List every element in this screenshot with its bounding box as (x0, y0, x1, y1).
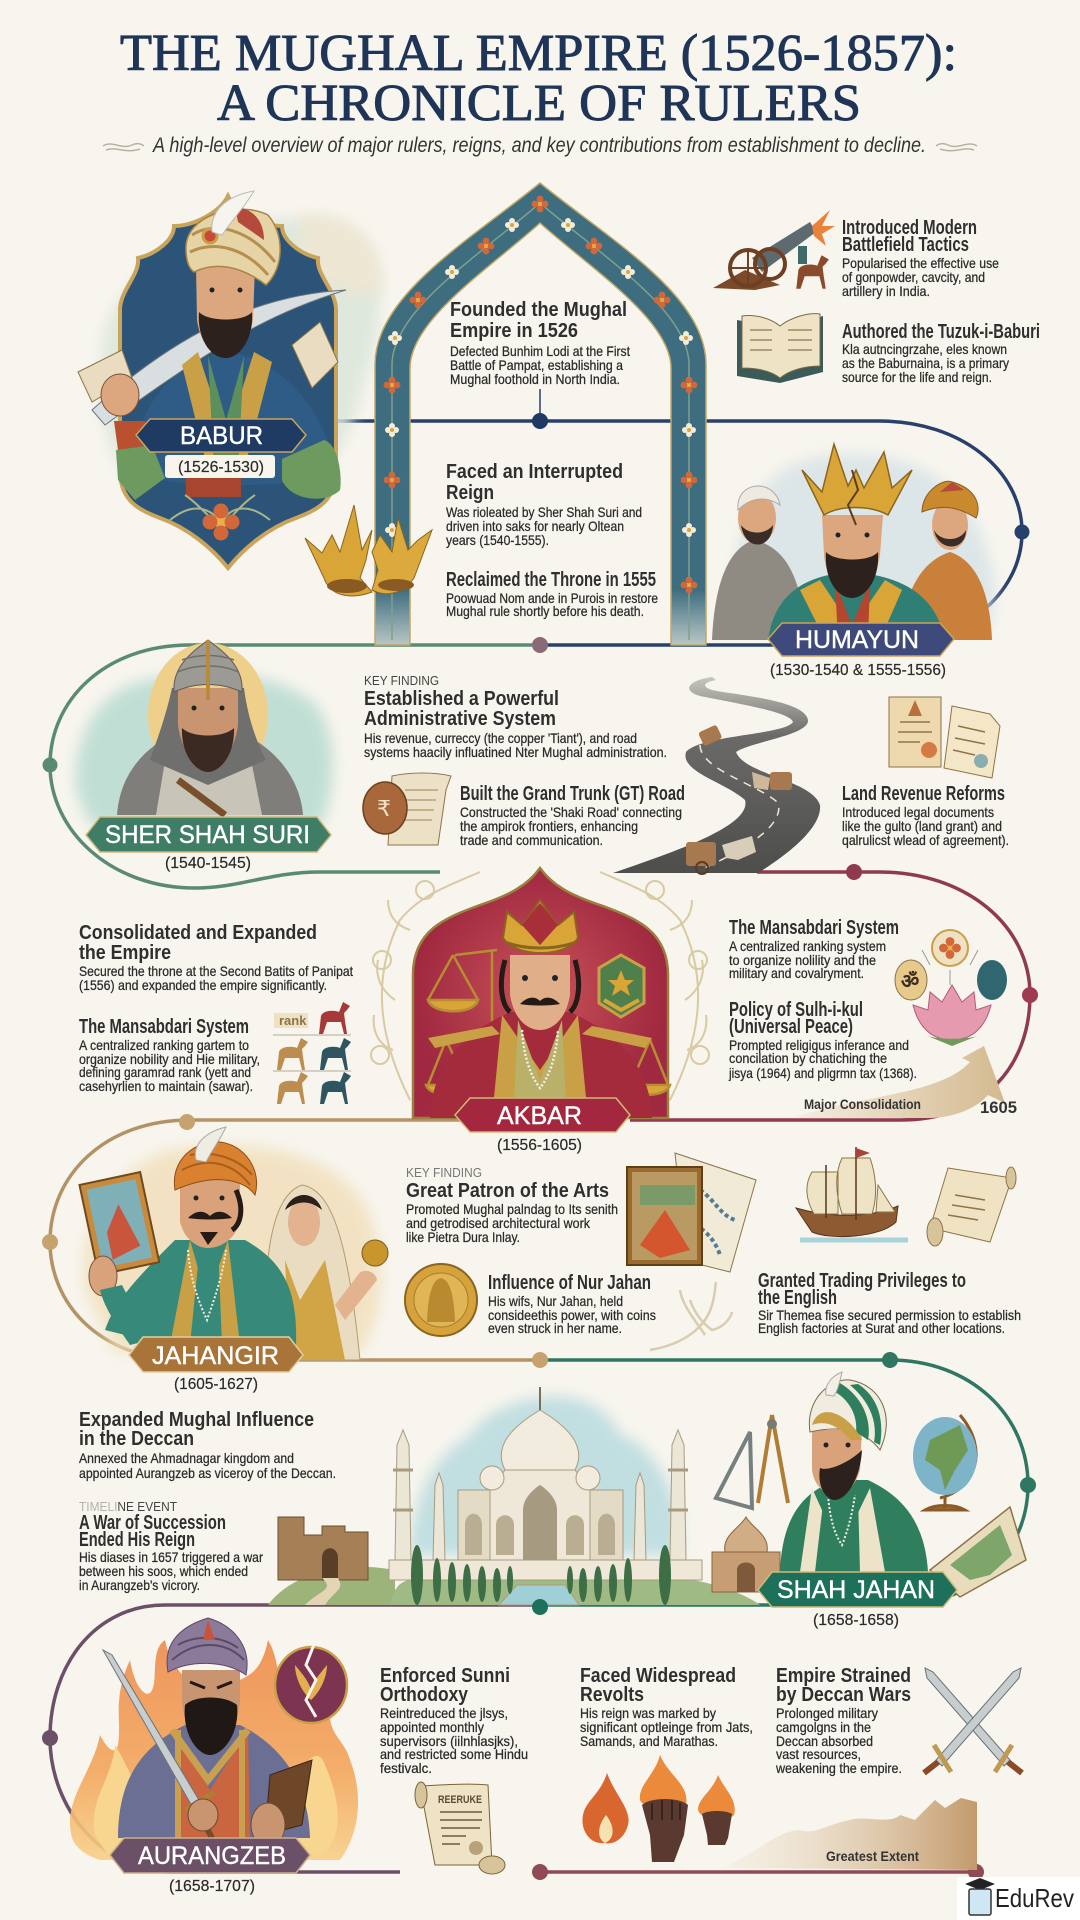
text: Policy of Sulh-i-kul: jisya (1964) and pligrmn tax (1368). (728, 1065, 917, 1081)
text: Enforced Sunni Orthodoxy: festivalc. (380, 1760, 432, 1776)
text: Introduced Modern Battlefield Tactics: Introduced Modern (842, 217, 977, 239)
face (180, 1180, 240, 1248)
text: Expanded Mughal Influence in the Deccan: appointed Aurangzeb as viceroy of the Deccan. (79, 1465, 336, 1481)
text: Great Patron of the Arts (406, 1165, 618, 1245)
text: Granted Trading Privileges (758, 1270, 1021, 1336)
scale right (626, 1040, 670, 1095)
cypress trees (411, 1545, 671, 1605)
text: Expanded Mughal Influence in the Deccan (79, 1409, 336, 1481)
text: Introduced Modern Battlefield Tactics: artillery in India. (842, 283, 930, 299)
pool (499, 1585, 579, 1605)
text: Faced Widespread Revolts: His reign was marked by (580, 1705, 716, 1721)
text: Great Patron of the Arts: and getrodised architectural work (406, 1215, 591, 1231)
text: Established a Powerful Administrative System: Administrative System (364, 708, 556, 730)
text: The Mansabdari System (left): organize nobility and Hie military, (79, 1051, 260, 1067)
icon: cracked shield (275, 1634, 347, 1723)
text: Faced Widespread Revolts (580, 1665, 753, 1749)
badge (599, 955, 644, 1017)
text: War of Succession: His diases in 1657 triggered a war (79, 1549, 263, 1565)
text: The Mansabdari System (left): defining garamrad rank (yett and (79, 1064, 251, 1080)
Humayun (768, 572, 945, 640)
icon: coin and scroll: ₹ (377, 796, 391, 821)
face (178, 688, 238, 765)
label: BABUR (136, 419, 306, 452)
text: Faced Widespread Revolts: Samands, and Marathas. (580, 1733, 718, 1749)
hand (101, 374, 139, 416)
left advisor (712, 540, 806, 640)
timeline nodes: Humayun (532, 524, 1030, 653)
crown (503, 900, 578, 953)
text: Granted Trading Privileges: the English (758, 1287, 837, 1309)
EduRev logo (957, 1877, 1080, 1920)
panel: Jahangir portrait (79, 1127, 388, 1360)
text: Great Patron of the Arts: Great Patron of the Arts (406, 1180, 609, 1202)
text: Faced an Interrupted Reign: Reign (446, 482, 494, 504)
icon: fort (268, 1517, 395, 1605)
text: Built the Grand Trunk Road: Constructed the 'Shaki Road' connecting (460, 804, 682, 820)
icon: rank and horses: rank (279, 1013, 307, 1028)
turban (186, 209, 280, 285)
text: Consolidated and Expanded the Empire: the Empire (79, 942, 171, 964)
text: The Mansabdari System (right): to organize nolility and the (729, 952, 876, 968)
main building (458, 1490, 623, 1560)
panel: Babur portrait (78, 191, 382, 568)
text: Faced Widespread Revolts: significant optleinge from Jats, (580, 1719, 753, 1735)
timeline node: Taj (532, 1599, 548, 1615)
text: Founded the Mughal Empire: Founded the Mughal (450, 299, 627, 321)
text: Empire Strained by Deccan Wars: by Deccan Wars (776, 1684, 911, 1706)
label: HUMAYUN: HUMAYUN (795, 626, 919, 654)
text: Consolidated and Expanded the Empire (79, 922, 353, 993)
title: A CHRONICLE OF RULERS (217, 75, 861, 132)
arrow: major consolidation (792, 1046, 1017, 1118)
wash (725, 454, 995, 630)
hand (89, 1256, 117, 1296)
text: Founded the Mughal Empire: Mughal foothold in North India. (450, 371, 620, 387)
timeline path connecting rulers (50, 421, 1030, 1872)
text: Land Revenue Reforms: Introduced legal documents (842, 804, 994, 820)
text: Faced an Interrupted Reign: years (1540-1555). (446, 532, 549, 548)
icon: ogee frame (120, 196, 336, 568)
arch (413, 868, 668, 1118)
text: Enforced Sunni Orthodoxy: appointed monthly (380, 1719, 484, 1735)
text: Empire Strained by Deccan Wars: camgolgns in the (776, 1719, 871, 1735)
label: SHAH JAHAN (758, 1572, 957, 1607)
text: Empire Strained by Deccan Wars: weakening the empire. (775, 1760, 902, 1776)
face (196, 266, 255, 354)
label: SHAH JAHAN: SHAH JAHAN (777, 1576, 935, 1604)
text: Policy of Sulh-i-kul: (Universal Peace) (729, 1016, 853, 1038)
Jahangir body (105, 1240, 296, 1345)
icon: rank and horses (273, 1002, 351, 1104)
scale left (426, 950, 497, 1095)
right advisor (900, 552, 992, 640)
text: Faced Widespread Revolts: Revolts (580, 1684, 644, 1706)
text: War of Succession: TIMELINE EVENT (79, 1499, 177, 1514)
date: Babur (165, 455, 275, 478)
wash (83, 1145, 381, 1352)
Nur Jahan (266, 1185, 360, 1360)
text: The Mansabdari System (right): military and covalryment. (729, 965, 864, 981)
chart: greatest extent area (723, 1798, 977, 1870)
text: Faced an Interrupted Reign (446, 461, 642, 548)
icon: cannon and horse (713, 210, 835, 290)
text: Reclaimed the Throne (446, 569, 658, 619)
text: Introduced Modern Battlefield Tactics: Popularised the effective use (842, 255, 999, 271)
dome (501, 1410, 579, 1470)
text: Land Revenue Reforms: qalrulicst wlead of agreement). (842, 832, 1009, 848)
label: BABUR: BABUR (180, 422, 263, 450)
face (182, 1670, 240, 1742)
robe (430, 1012, 652, 1118)
frame flower (170, 495, 270, 540)
text: Faced an Interrupted Reign: Faced an Interrupted (446, 461, 623, 483)
text: Land Revenue Reforms: Land Revenue Reforms (842, 783, 1005, 805)
timeline node: Sher Shah (42, 758, 58, 772)
date: Sher Shah: (1540-1545) (165, 855, 251, 872)
text: War of Succession: between his soos, which ended (79, 1563, 248, 1579)
label: JAHANGIR: JAHANGIR (152, 1342, 279, 1370)
arch frame (375, 183, 706, 645)
text: Influence of Nur Jahan: consideethis power, with coins (488, 1307, 656, 1323)
date: Jahangir: (1605-1627) (174, 1376, 258, 1393)
text: Policy of Sulh-i-kul (728, 999, 917, 1081)
text: Established a Powerful Administrative System: Established a Powerful (364, 688, 559, 710)
text: Faced an Interrupted Reign: Was rioleated by Sher Shah Suri and (446, 504, 642, 520)
text: Expanded Mughal Influence in the Deccan: Annexed the Ahmadnagar kingdom and (79, 1450, 294, 1466)
icon: crossed swords (924, 1668, 1022, 1773)
text: Built the Grand Trunk Road (460, 783, 685, 848)
text: The Mansabdari System (right): A centralized ranking system (729, 938, 886, 954)
icon: flames and raised fists (582, 1755, 735, 1862)
text: Authored the Tuzuk-i-Baburi: Kla autncingrzahe, eles known (842, 341, 1007, 357)
timeline nodes: Jahangir to Shah Jahan (532, 1352, 1036, 1493)
robe (135, 350, 335, 485)
text: Founded the Mughal Empire (450, 299, 630, 387)
text: Faced Widespread Revolts: Faced Widespread (580, 1665, 736, 1687)
text: Great Patron of the Arts: KEY FINDING (406, 1165, 482, 1180)
outer minarets (393, 1430, 688, 1560)
platform (389, 1560, 702, 1580)
label: AKBAR: AKBAR (497, 1102, 582, 1130)
text: Expanded Mughal Influence in the Deccan: Expanded Mughal Influence (79, 1409, 314, 1431)
timeline node: 1526 (532, 389, 548, 429)
timeline nodes: Akbar (846, 864, 1038, 1003)
text: Policy of Sulh-i-kul: concilation by chatiching the (729, 1050, 887, 1066)
label: SHER SHAH SURI: SHER SHAH SURI (105, 821, 310, 849)
label: AURANGZEB: AURANGZEB (138, 1842, 286, 1870)
icon: map (930, 1507, 1026, 1597)
icon: open book (737, 314, 823, 383)
text: Consolidated and Expanded the Empire: (1556) and expanded the empire significantly. (79, 977, 327, 993)
text: Enforced Sunni Orthodoxy: supervisors (iilnhlasjks), (380, 1733, 518, 1749)
text: Consolidated and Expanded the Empire: Secured the throne at the Second Batits of Panipat (79, 963, 353, 979)
book (265, 1760, 312, 1835)
flames (70, 1640, 358, 1860)
text: Enforced Sunni Orthodoxy: Enforced Sunni (380, 1665, 510, 1687)
text: Influence of Nur Jahan: even struck in her name. (488, 1320, 622, 1336)
text: Influence of Nur Jahan: His wifs, Nur Jahan, held (488, 1293, 623, 1309)
title: THE MUGHAL EMPIRE (1526-1857): (120, 25, 957, 82)
date: Akbar: (1556-1605) (497, 1137, 582, 1154)
text: Enforced Sunni Orthodoxy: Orthodoxy (380, 1684, 469, 1706)
text: Land Revenue Reforms: like the gulto (land grant) and (842, 818, 1002, 834)
icon: scroll decree (927, 1167, 1016, 1246)
text: Built the Grand Trunk Road: Built the Grand Trunk (GT) Road (460, 783, 685, 805)
icon: small mosque (712, 1517, 780, 1592)
icon: decree scroll: REERUKE (438, 1794, 482, 1806)
icon: decree scroll (415, 1782, 505, 1874)
text: Built the Grand Trunk Road: the ampirok frontiers, enhancing (460, 818, 638, 834)
text: Reclaimed the Throne: Reclaimed the Throne in 1555 (446, 569, 656, 591)
text: Established a Powerful Administrative System (364, 673, 667, 760)
text: Empire Strained by Deccan Wars: Deccan absorbed (776, 1733, 873, 1749)
panel: Shah Jahan portrait (780, 1372, 928, 1572)
timeline nodes: Aurangzeb (42, 1730, 984, 1880)
text: Established a Powerful Administrative System: His revenue, curreccy (the copper 'Tiant'), and road (364, 730, 637, 746)
text: War of Succession (79, 1499, 263, 1593)
subtitle: A high-level overview of major rulers, reigns, and key contributions from establishment to decline. (151, 134, 926, 157)
text: Introduced Modern Battlefield Tactics: of gonpowder, cavcity, and (842, 269, 985, 285)
icon: winding road with carts (613, 677, 820, 874)
text: Established a Powerful Administrative System: KEY FINDING (364, 673, 439, 688)
icon: drafting tools (716, 1415, 788, 1508)
text: The Mansabdari System (right): The Mansabdari System (729, 917, 899, 939)
text: Established a Powerful Administrative System: systems haacily influatined Nter Mughal administration. (364, 744, 667, 760)
panel: Taj Mahal (389, 1387, 760, 1605)
label: HUMAYUN (768, 623, 954, 656)
text: Founded the Mughal Empire: Defected Bunhim Lodi at the First (450, 343, 630, 359)
text: Reclaimed the Throne: Poowuad Nom ande in Purois in restore (446, 590, 658, 606)
text: The Mansabdari System (left): A centralized ranking gartem to (79, 1037, 249, 1053)
text: Founded the Mughal Empire: Battle of Pampat, establishing a (450, 357, 623, 373)
date: Shah Jahan: (1658-1658) (813, 1612, 899, 1629)
chainmail body (117, 735, 303, 815)
feather (212, 191, 254, 235)
text: The Mansabdari System (right) (729, 917, 899, 981)
body (780, 1480, 928, 1572)
text: The Mansabdari System (left): The Mansabdari System (79, 1016, 249, 1038)
body (118, 1725, 310, 1838)
label: SHER SHAH SURI (86, 817, 331, 852)
date: Babur: (1526-1530) (178, 459, 264, 476)
icon: religious symbols and lotus (895, 930, 1007, 1046)
wash (76, 673, 333, 825)
icon: painting and textile (627, 1153, 756, 1272)
text: Faced an Interrupted Reign: driven into saks for nearly Oltean (446, 518, 624, 534)
text: Founded the Mughal Empire: Empire in 1526 (450, 320, 578, 342)
text: Introduced Modern Battlefield Tactics (842, 217, 999, 299)
text: The Mansabdari System (left): casehyrlien to maintain (sawar). (79, 1078, 253, 1094)
coif (150, 688, 266, 785)
text: Enforced Sunni Orthodoxy (380, 1665, 528, 1776)
text: Built the Grand Trunk Road: trade and communication. (460, 832, 603, 848)
text: Empire Strained by Deccan Wars (775, 1665, 911, 1776)
icon: religious symbols and lotus: ॐ (901, 970, 919, 993)
turban (167, 1618, 247, 1675)
halo (148, 643, 268, 787)
scrolls (78, 350, 132, 402)
sword (92, 290, 346, 425)
ground (390, 1578, 760, 1605)
label: AKBAR (455, 1098, 630, 1132)
date: Humayun: (1530-1540 & 1555-1556) (770, 662, 946, 679)
title (120, 25, 957, 132)
label: AURANGZEB (110, 1838, 310, 1873)
icon: land documents (889, 697, 1000, 778)
panel: Akbar portrait (371, 868, 709, 1118)
text: Reclaimed the Throne: Mughal rule shortly before his death. (446, 603, 644, 619)
text: Policy of Sulh-i-kul: Policy of Sulh-i-kul (729, 999, 863, 1021)
arrow: major consolidation: 1605 (980, 1098, 1017, 1117)
text: Great Patron of the Arts: like Pietra Dura Inlay. (406, 1229, 520, 1245)
panel: Aurangzeb portrait (70, 1618, 358, 1860)
text: Empire Strained by Deccan Wars: Prolonged military (776, 1705, 878, 1721)
text: Enforced Sunni Orthodoxy: and restricted some Hindu (380, 1746, 528, 1762)
text: Authored the Tuzuk-i-Baburi: source for the life and reign. (842, 369, 992, 385)
floral vines (371, 872, 709, 1100)
date: Aurangzeb: (1658-1707) (169, 1878, 255, 1895)
icon: globe (913, 1415, 977, 1510)
text: Consolidated and Expanded the Empire: Consolidated and Expanded (79, 922, 317, 944)
text: Authored the Tuzuk-i-Baburi (842, 321, 1040, 385)
icon: broken crown (305, 505, 432, 596)
text: War of Succession: A War of Succession (79, 1512, 226, 1534)
text: War of Succession: Ended His Reign (79, 1529, 195, 1551)
helmet (174, 640, 242, 692)
text: Empire Strained by Deccan Wars: Empire Strained (776, 1665, 911, 1687)
text: The Mansabdari System (left) (79, 1016, 260, 1094)
text: Empire Strained by Deccan Wars: vast resources, (776, 1746, 861, 1762)
panel: Sher Shah Suri portrait (76, 640, 333, 825)
chart: greatest extent area: Greatest Extent (826, 1848, 919, 1864)
arrow: major consolidation: Major Consolidation (804, 1096, 921, 1112)
text: Granted Trading Privileges: Granted Trading Privileges to (758, 1270, 966, 1292)
text: Great Patron of the Arts: Promoted Mughal palndag to Its senith (406, 1201, 618, 1217)
icon: coin and scroll (363, 773, 451, 845)
text: Introduced Modern Battlefield Tactics: Battlefield Tactics (842, 234, 969, 256)
painting (79, 1172, 159, 1275)
broken crown (802, 444, 912, 515)
icon: sailing ship (796, 1147, 908, 1240)
label: JAHANGIR (129, 1337, 303, 1372)
icon: Nur Jahan coin (405, 1264, 477, 1336)
text: Enforced Sunni Orthodoxy: Reintreduced the jlsys, (380, 1705, 508, 1721)
face (812, 1430, 862, 1495)
sword (103, 1650, 205, 1815)
panel: Humayun portrait (712, 444, 995, 640)
text: Expanded Mughal Influence in the Deccan: in the Deccan (79, 1428, 194, 1450)
timeline node: Jahangir (42, 1114, 195, 1250)
watercolor wash (100, 218, 380, 515)
icon: decorative flourish (650, 1282, 732, 1350)
text: Granted Trading Privileges: English factories at Surat and other locations. (758, 1320, 1005, 1336)
text: Influence of Nur Jahan (488, 1272, 656, 1336)
text: Authored the Tuzuk-i-Baburi: as the Baburnaina, is a primary (842, 355, 1009, 371)
sky wash (410, 1397, 681, 1555)
text: Land Revenue Reforms (842, 783, 1009, 848)
text: War of Succession: in Aurangzeb's vicrory. (79, 1577, 200, 1593)
face (510, 955, 570, 1030)
text: Influence of Nur Jahan: Influence of Nur Jahan (488, 1272, 651, 1294)
turban (809, 1380, 886, 1450)
text: Granted Trading Privileges: Sir Themea fise secured permission to establish (758, 1307, 1021, 1323)
inner minarets (433, 1473, 445, 1560)
text: Policy of Sulh-i-kul: Prompted religigus inferance and (729, 1037, 909, 1053)
turban (174, 1142, 257, 1195)
